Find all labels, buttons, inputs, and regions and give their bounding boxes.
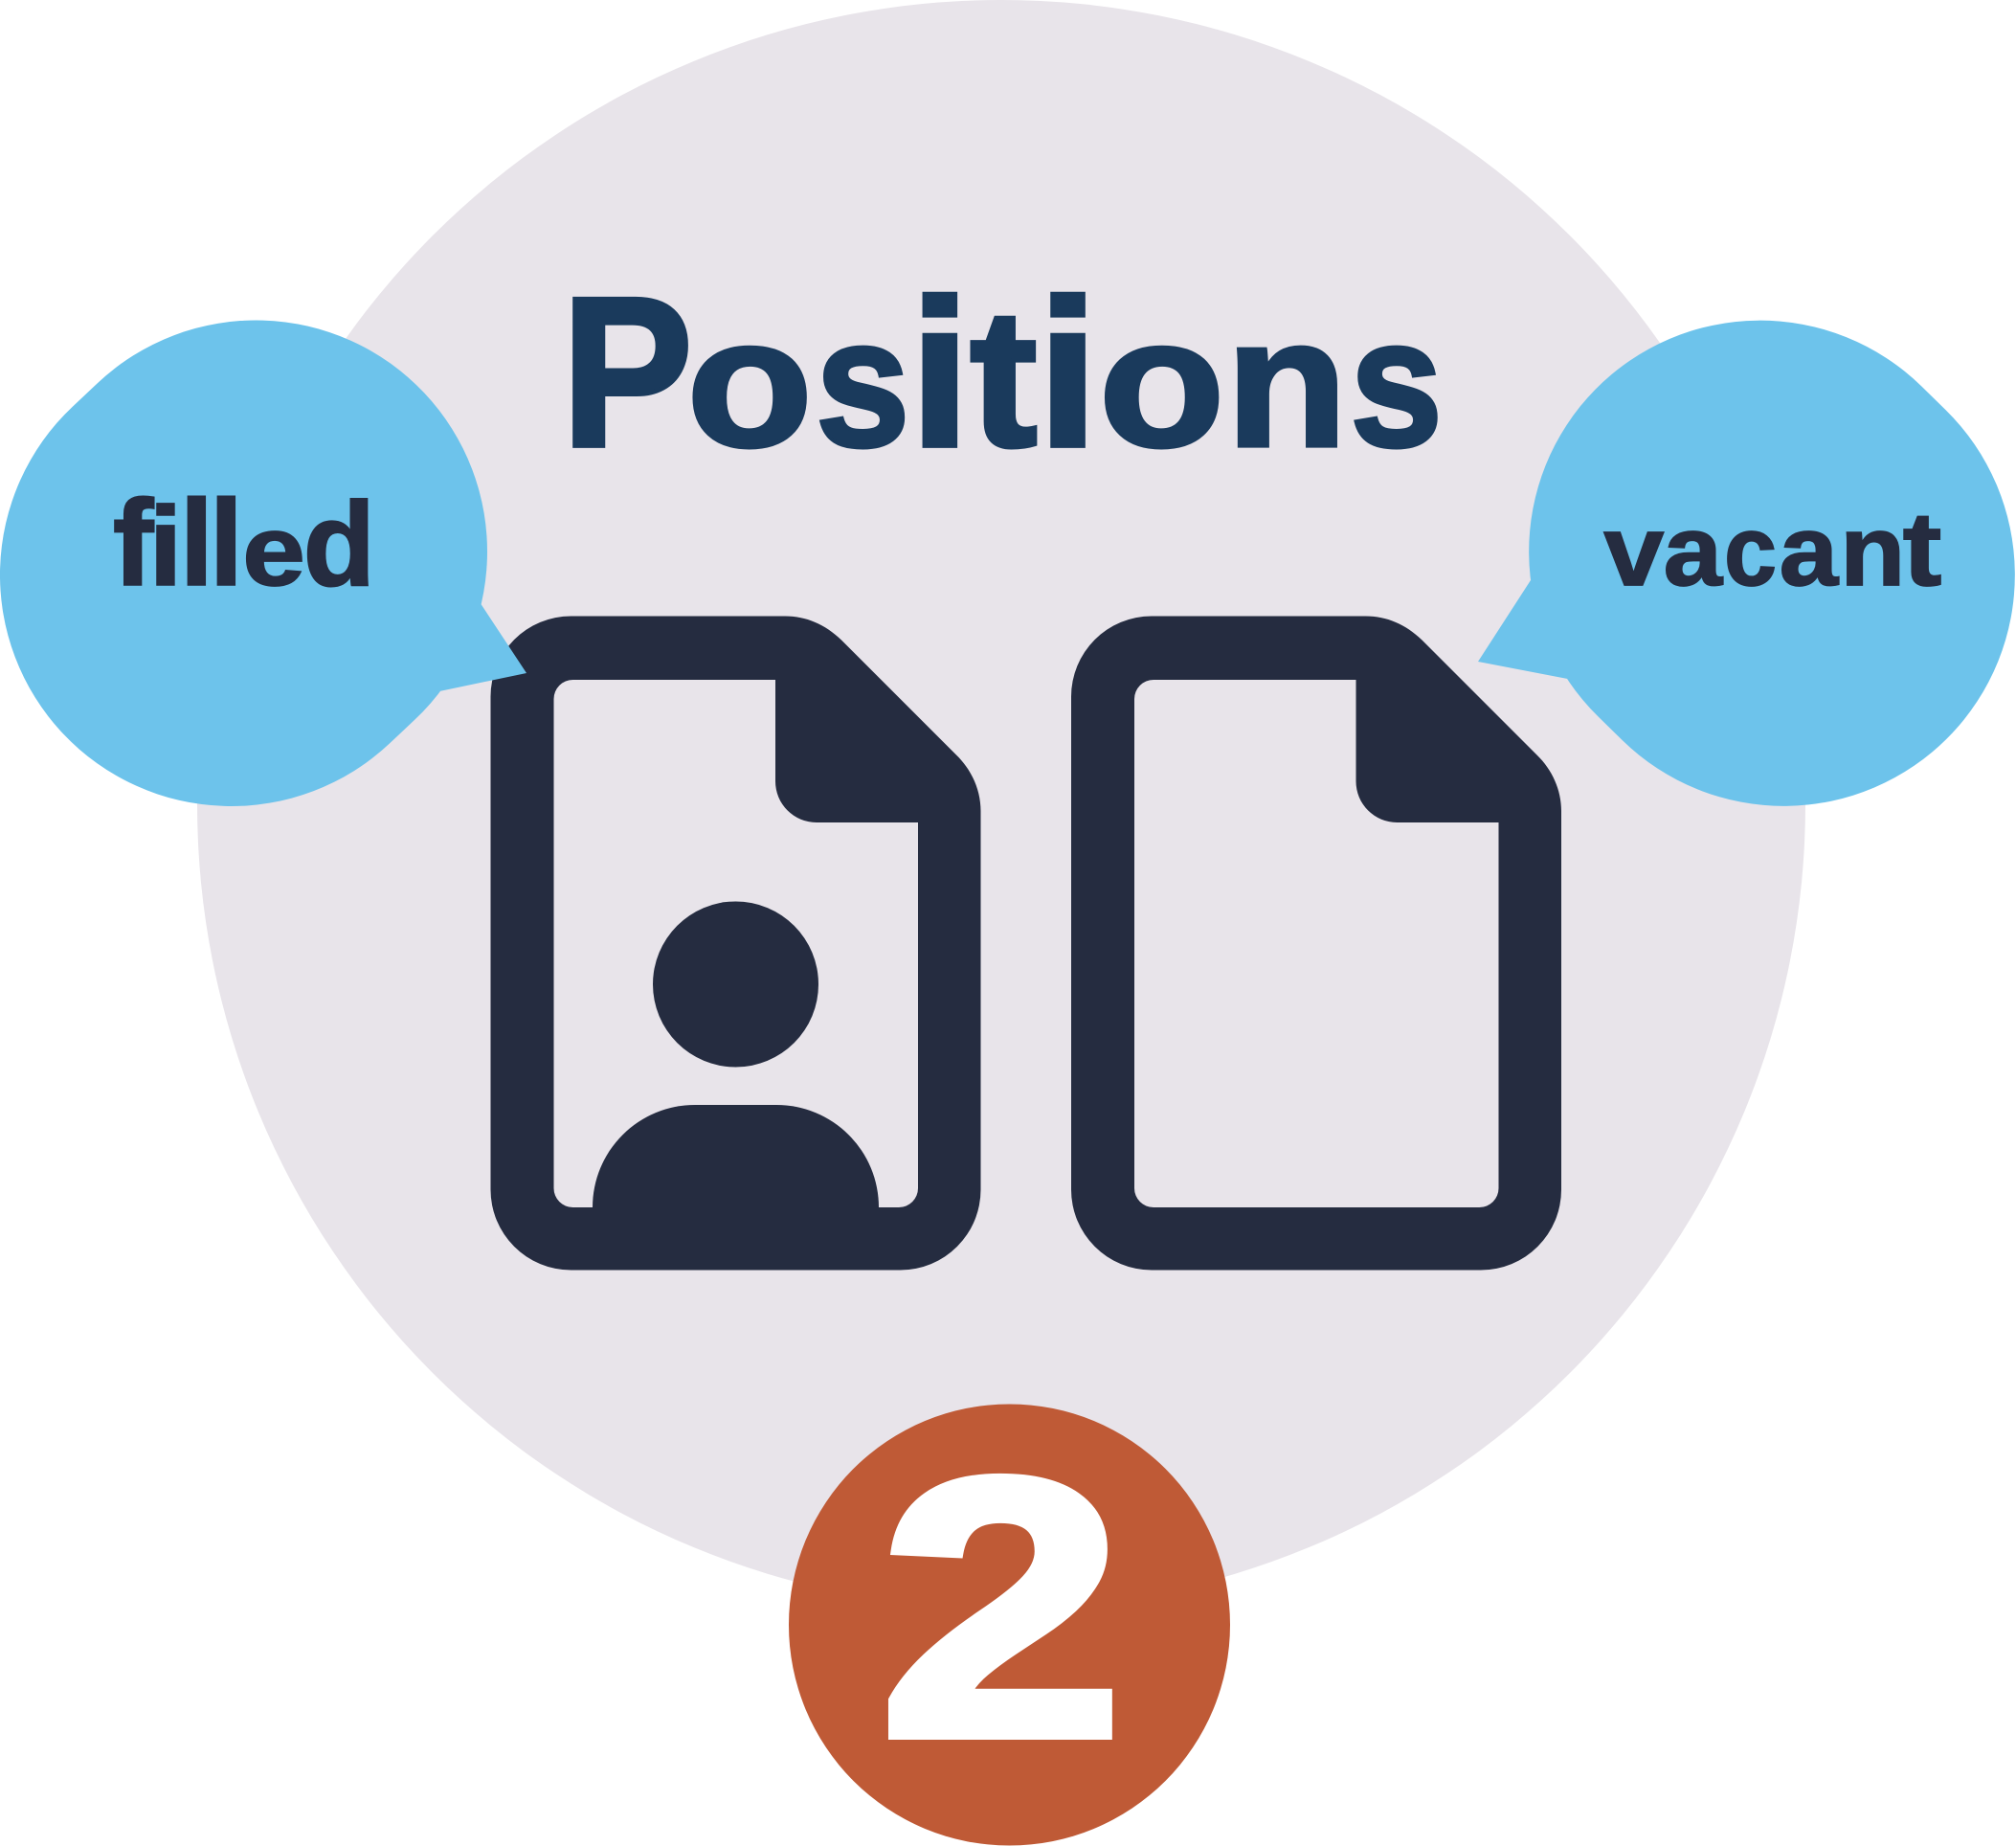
label: vacant: c [1724,495,1777,607]
label: filled: f [113,475,154,611]
label: filled: l [210,475,243,611]
icon: filled position document with person [490,617,980,1270]
person head [653,902,818,1067]
label: vacant: t [1903,490,1941,608]
callout: vacant [1478,321,2015,806]
label: vacant [1603,490,1941,608]
number 2: 2 [879,1402,1124,1812]
badge circle [789,1404,1230,1846]
title: Positions [562,254,1443,491]
background circle [197,0,1805,1609]
title: Positions: n [1226,281,1348,485]
label: vacant: n [1840,495,1905,606]
title: Positions: i [909,257,971,490]
label: filled: e [242,495,305,606]
label: vacant: a [1780,495,1839,606]
label: vacant: v [1603,496,1664,607]
speech bubble: filled [0,320,526,806]
label: filled [113,475,375,611]
label: filled: l [180,475,213,611]
document outline [490,617,980,1270]
icon: vacant position document [1071,617,1561,1270]
label: filled: i [148,484,183,609]
speech bubble: vacant [1478,321,2015,806]
callout: filled [0,320,526,806]
title: Positions: s [816,281,909,485]
title: Positions: P [562,254,693,491]
title: Positions: i [1038,257,1099,490]
title: Positions: o [686,281,813,485]
label: vacant: a [1664,495,1723,606]
label: filled: d [303,478,375,611]
step badge: number 2 [789,1402,1230,1846]
title: Positions: t [970,270,1038,488]
title: Positions: s [1350,281,1443,484]
title: Positions: o [1099,281,1224,485]
person body [593,1105,879,1216]
